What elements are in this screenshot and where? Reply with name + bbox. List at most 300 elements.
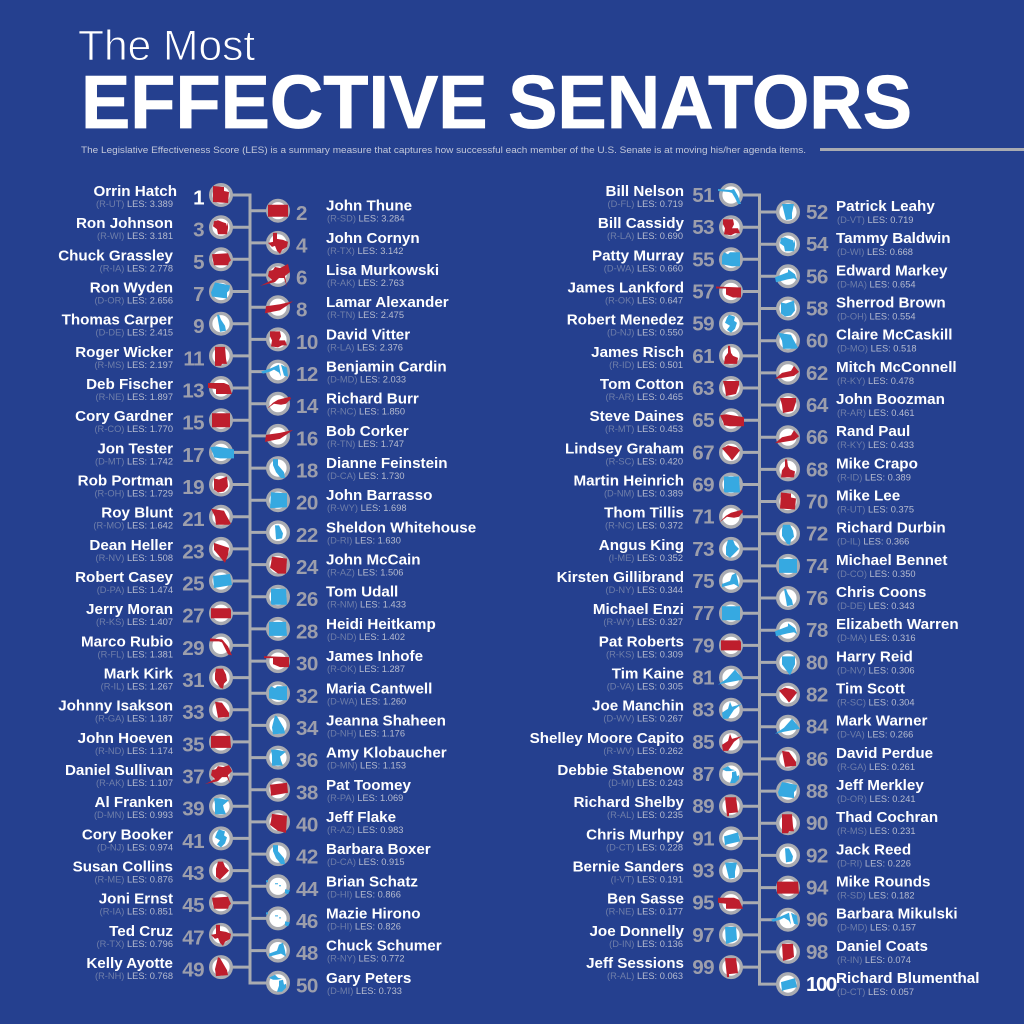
score: (D-DE) LES: 2.415	[95, 328, 173, 338]
name: Jeff Merkley	[836, 777, 924, 794]
score: (D-CA) LES: 1.730	[327, 471, 405, 481]
rank: 65	[692, 409, 714, 432]
name: Sherrod Brown	[836, 294, 946, 312]
icon: Colorado	[211, 410, 231, 430]
senator 30: James Inhofe	[264, 648, 423, 676]
name: Brian Schatz	[326, 873, 418, 890]
rank: 49	[182, 959, 204, 982]
senator 22: Sheldon Whitehouse	[268, 519, 476, 547]
rank: 78	[806, 619, 828, 642]
rank: 88	[806, 780, 828, 803]
score: (R-OK) LES: 1.287	[327, 664, 405, 674]
icon: Iowa	[211, 892, 231, 913]
icon: Arkansas	[778, 395, 798, 415]
name: Tom Cotton	[600, 376, 684, 393]
rank: 14	[296, 395, 319, 418]
score: (D-DE) LES: 0.343	[837, 601, 915, 611]
senator 7: Ron Wyden	[90, 280, 231, 306]
name: Ron Wyden	[90, 280, 173, 296]
score: (D-RI) LES: 0.226	[837, 858, 911, 868]
rank: 42	[296, 846, 318, 869]
rank: 33	[182, 701, 204, 724]
score: (D-OR) LES: 0.241	[837, 794, 916, 804]
column: ranks 51 to 99	[530, 183, 744, 981]
name: Maria Cantwell	[326, 680, 432, 697]
icon: Tennessee	[265, 426, 293, 446]
rank: 16	[296, 427, 318, 450]
rank: 25	[182, 572, 204, 596]
rank: 38	[296, 781, 318, 804]
rank: 3	[193, 219, 204, 242]
name: Daniel Coats	[836, 938, 928, 955]
column: ranks 52 to 100	[771, 198, 979, 997]
senator 31: Mark Kirk	[101, 666, 231, 692]
icon: Kentucky	[775, 427, 799, 448]
senator 6: Lisa Murkowski	[260, 262, 439, 290]
rank: 53	[692, 216, 714, 239]
icon: Rhode Island	[268, 522, 288, 543]
senator 33: Johnny Isakson	[58, 698, 231, 724]
icon: West Virginia	[721, 699, 742, 720]
name: Barbara Boxer	[326, 841, 431, 858]
rank: 91	[692, 827, 714, 850]
rank: 55	[692, 248, 714, 271]
icon: Arkansas	[721, 378, 741, 398]
rank: 87	[692, 763, 714, 786]
rank: 37	[182, 766, 204, 789]
name: John McCain	[326, 552, 421, 569]
score: (R-IA) LES: 0.851	[100, 907, 173, 917]
name: Mazie Hirono	[326, 905, 421, 922]
icon: Arizona	[268, 554, 288, 575]
icon: Montana	[210, 442, 234, 463]
rank: 6	[296, 266, 307, 290]
icon: Connecticut	[778, 974, 798, 994]
icon: Wisconsin	[778, 234, 798, 254]
name: Tim Scott	[836, 681, 905, 698]
rank: 69	[692, 474, 714, 496]
score: (D-HI) LES: 0.866	[327, 889, 401, 899]
icon: Oregon	[211, 281, 231, 302]
senator 88: Jeff Merkley	[778, 777, 924, 804]
rank: 98	[806, 941, 828, 964]
score: (R-OK) LES: 0.647	[605, 296, 683, 306]
rank: 79	[692, 634, 714, 657]
rank: 67	[692, 441, 714, 464]
rank: 20	[296, 492, 318, 515]
rank: 30	[296, 653, 318, 676]
rank: 75	[692, 570, 714, 593]
icon: Kansas	[721, 635, 741, 656]
score: (D-WV) LES: 0.267	[603, 714, 683, 724]
senator 83: Joe Manchin	[592, 698, 742, 724]
senator 65: Steve Daines	[589, 408, 744, 434]
rank: 17	[182, 444, 204, 467]
name: Sheldon Whitehouse	[326, 519, 476, 536]
rank: 45	[182, 894, 204, 917]
score: (R-OH) LES: 1.729	[94, 488, 173, 498]
icon: New York	[721, 571, 741, 591]
rank: 58	[806, 298, 828, 320]
icon: California	[268, 458, 288, 478]
rank: 64	[806, 394, 829, 417]
senator 4: John Cornyn	[268, 230, 420, 257]
senator 20: John Barrasso	[268, 487, 432, 515]
score: (D-MI) LES: 0.733	[327, 986, 402, 996]
rank: 13	[182, 380, 204, 402]
name: Jeanna Shaheen	[326, 712, 446, 729]
name: Bill Nelson	[606, 183, 684, 200]
name: Tammy Baldwin	[836, 230, 950, 247]
senator 89: Richard Shelby	[573, 794, 741, 820]
subtitle: definition of LES: The Legislative Effectiveness Score (LES) is a summary measure that captures how successful each member of the U.S. Senate is at moving his/her agenda items.	[81, 145, 806, 156]
icon: Nevada	[778, 652, 798, 675]
rank: 61	[692, 345, 714, 368]
rank: 81	[692, 667, 714, 690]
name: James Lankford	[568, 280, 684, 296]
score: (D-NJ) LES: 0.550	[607, 328, 683, 338]
score: (D-VT) LES: 0.719	[837, 215, 913, 225]
icon: Maryland	[261, 361, 288, 382]
senator 90: Thad Cochran	[778, 809, 938, 836]
icon: Massachusetts	[775, 266, 798, 287]
icon: Nebraska	[718, 892, 743, 913]
score: (I-ME) LES: 0.352	[609, 553, 683, 563]
name: Mike Crapo	[836, 455, 918, 472]
rank: 15	[182, 412, 204, 435]
score: (D-VA) LES: 0.305	[607, 682, 683, 692]
name: Ben Sasse	[607, 891, 684, 908]
icon: Connecticut	[721, 828, 741, 849]
senator 2: John Thune	[268, 198, 412, 225]
score: (R-LA) LES: 2.376	[327, 342, 403, 352]
score: (D-ND) LES: 1.402	[327, 632, 405, 642]
senator 93: Bernie Sanders	[573, 859, 741, 885]
name: David Vitter	[326, 326, 410, 343]
name: Richard Burr	[326, 391, 419, 408]
senator 9: Thomas Carper	[62, 312, 231, 338]
senator 67: Lindsey Graham	[565, 440, 741, 466]
icon: Iowa	[211, 249, 231, 270]
score: (R-NV) LES: 1.508	[95, 553, 173, 563]
score: (D-NY) LES: 0.344	[605, 585, 683, 595]
name: Elizabeth Warren	[836, 616, 959, 633]
icon: Oklahoma	[264, 651, 289, 671]
score: (D-IL) LES: 0.366	[837, 537, 909, 547]
name: Chris Murhpy	[586, 826, 685, 843]
name: Roger Wicker	[75, 344, 173, 361]
name: Jeff Flake	[326, 809, 396, 826]
rank: 51	[692, 184, 714, 207]
score: (D-NV) LES: 0.306	[837, 665, 915, 675]
icon: Illinois	[211, 667, 231, 689]
score: (D-NM) LES: 0.389	[604, 488, 683, 498]
senator 80: Harry Reid	[778, 648, 915, 675]
score: (R-NM) LES: 1.433	[327, 600, 406, 610]
name: Chuck Schumer	[326, 938, 442, 955]
senator 17: Jon Tester	[95, 440, 234, 467]
score: (D-MN) LES: 1.153	[327, 761, 406, 771]
rank: 8	[296, 299, 307, 322]
icon: Nebraska	[208, 378, 232, 398]
icon: Delaware	[211, 313, 231, 334]
name: Barbara Mikulski	[836, 906, 958, 923]
score: (D-OH) LES: 0.554	[837, 312, 916, 322]
score: (D-MO) LES: 0.518	[837, 344, 917, 354]
name: Jack Reed	[836, 841, 911, 858]
icon: New York	[268, 940, 288, 961]
icon: Wyoming	[268, 490, 288, 510]
score: (R-SC) LES: 0.420	[605, 456, 683, 466]
score: (R-UT) LES: 3.389	[96, 199, 173, 209]
icon: Wisconsin	[211, 217, 231, 238]
senator 71: Thom Tillis	[604, 505, 743, 531]
name: Robert Menedez	[567, 312, 684, 329]
icon: Rhode Island	[778, 845, 798, 866]
score: (R-IA) LES: 2.778	[100, 263, 173, 273]
icon: Hawaii	[266, 908, 290, 929]
icon: Indiana	[778, 942, 798, 962]
senator 15: Cory Gardner	[75, 408, 231, 435]
rank: 83	[692, 699, 714, 722]
icon: Pennsylvania	[211, 571, 232, 591]
icon: Kentucky	[775, 363, 799, 383]
icon: Louisiana	[721, 217, 741, 238]
name: Harry Reid	[836, 648, 913, 665]
title: The Most: The Most	[78, 23, 255, 70]
icon: North Dakota	[211, 732, 231, 752]
rank: 31	[182, 669, 204, 692]
icon: Oklahoma	[716, 281, 741, 302]
icon: North Carolina	[719, 506, 743, 527]
score: (D-PA) LES: 1.474	[97, 585, 173, 595]
senator 24: John McCain	[268, 552, 421, 579]
score: (R-SD) LES: 3.284	[327, 214, 405, 224]
score: (D-CA) LES: 0.915	[327, 857, 405, 867]
name: John Hoeven	[78, 730, 173, 747]
senator 72: Richard Durbin	[778, 520, 946, 547]
senator 44: Brian Schatz	[266, 873, 418, 901]
icon: Arizona	[268, 812, 288, 833]
rank: 92	[806, 844, 828, 867]
senator 5: Chuck Grassley	[58, 247, 231, 274]
rank: 77	[692, 602, 714, 625]
senator 1: Orrin Hatch	[93, 183, 231, 210]
name: Joe Manchin	[592, 698, 684, 715]
icon: Alabama	[721, 957, 741, 977]
icon: Michigan	[721, 764, 741, 784]
name: Lindsey Graham	[565, 440, 684, 457]
senator 85: Shelley Moore Capito	[530, 730, 742, 756]
name: Dean Heller	[89, 537, 173, 554]
icon: Georgia	[211, 699, 231, 720]
rank: 80	[806, 651, 828, 674]
rank: 5	[193, 251, 204, 274]
icon: Tennessee	[265, 297, 293, 318]
rank: 95	[692, 892, 714, 915]
icon: South Carolina	[721, 442, 741, 463]
icon: Vermont	[721, 860, 741, 881]
rank: 68	[806, 458, 828, 481]
icon: Idaho	[721, 346, 741, 366]
header rule	[820, 148, 1024, 151]
score: (R-IN) LES: 0.074	[837, 955, 911, 965]
senator 21: Roy Blunt	[93, 505, 231, 531]
score: (D-MA) LES: 0.654	[837, 279, 916, 289]
score: (R-KY) LES: 0.433	[837, 440, 914, 450]
rank: 21	[182, 508, 204, 531]
senator 96: Barbara Mikulski	[771, 906, 958, 933]
icon: Louisiana	[268, 329, 288, 350]
senator 8: Lamar Alexander	[265, 294, 449, 322]
score: (D-HI) LES: 0.826	[327, 921, 401, 931]
score: (R-NE) LES: 1.897	[95, 392, 173, 402]
senator 56: Edward Markey	[775, 262, 948, 289]
name: Shelley Moore Capito	[530, 730, 684, 747]
rank: 90	[806, 812, 828, 835]
rank: 35	[182, 733, 204, 756]
name: Heidi Heitkamp	[326, 616, 436, 633]
score: (D-NJ) LES: 0.974	[97, 842, 173, 852]
name: James Inhofe	[326, 648, 423, 665]
name: Richard Shelby	[573, 794, 685, 811]
senator 92: Jack Reed	[778, 841, 911, 868]
score: (D-MN) LES: 0.993	[94, 810, 173, 820]
score: (R-MS) LES: 2.197	[94, 360, 173, 370]
name: Thomas Carper	[62, 312, 173, 329]
rank: 76	[806, 587, 828, 610]
name: Gary Peters	[326, 970, 411, 987]
senator 34: Jeanna Shaheen	[268, 712, 446, 740]
score: (R-ID) LES: 0.389	[837, 472, 911, 482]
rank: 60	[806, 330, 828, 353]
icon: Vermont	[778, 202, 798, 222]
score: (R-UT) LES: 0.375	[837, 504, 914, 514]
senator 51: Bill Nelson	[606, 183, 741, 209]
icon: Massachusetts	[775, 620, 798, 640]
rank: 96	[806, 909, 828, 932]
score: (D-WI) LES: 0.668	[837, 247, 913, 257]
rank: 100	[806, 973, 837, 996]
score: (D-CT) LES: 0.057	[837, 987, 914, 997]
senator 48: Chuck Schumer	[268, 938, 442, 965]
icon: Idaho	[778, 459, 798, 480]
rank: 57	[692, 280, 714, 304]
icon: Utah	[778, 491, 798, 512]
score: (R-NC) LES: 1.850	[327, 407, 405, 417]
senator 78: Elizabeth Warren	[775, 616, 959, 643]
senator 46: Mazie Hirono	[266, 905, 421, 933]
score: (D-VA) LES: 0.266	[837, 730, 913, 740]
name: Lisa Murkowski	[326, 262, 439, 279]
rank: 36	[296, 749, 318, 772]
score: (D-MT) LES: 1.742	[95, 456, 173, 466]
name: Pat Toomey	[326, 777, 412, 794]
rank: 85	[692, 731, 714, 754]
senator 14: Richard Burr	[267, 391, 419, 418]
name: John Cornyn	[326, 230, 420, 247]
name: Susan Collins	[73, 859, 173, 876]
rank: 48	[296, 942, 318, 965]
icon: Texas	[268, 233, 288, 254]
score: (R-TX) LES: 3.142	[327, 246, 403, 256]
score: (R-KS) LES: 0.309	[606, 649, 683, 659]
icon: Maine	[211, 860, 231, 881]
senator 68: Mike Crapo	[778, 455, 918, 482]
senator 36: Amy Klobaucher	[268, 745, 447, 772]
score: (R-NE) LES: 0.177	[605, 907, 683, 917]
senator 49: Kelly Ayotte	[86, 955, 231, 982]
senator 59: Robert Menedez	[567, 312, 741, 338]
senator 28: Heidi Heitkamp	[268, 616, 436, 643]
name: Debbie Stabenow	[557, 762, 684, 779]
score: (R-MT) LES: 0.453	[605, 424, 683, 434]
name: Mark Warner	[836, 713, 928, 730]
score: (R-SD) LES: 0.182	[837, 891, 915, 901]
score: (D-IN) LES: 0.136	[609, 939, 683, 949]
senator 74: Michael Bennet	[778, 552, 947, 579]
score: (R-AR) LES: 0.461	[837, 408, 915, 418]
rank: 10	[296, 331, 318, 354]
score: (R-AL) LES: 0.063	[607, 971, 683, 981]
icon: Maryland	[771, 909, 798, 930]
score: (D-FL) LES: 0.719	[608, 199, 683, 209]
score: (R-TN) LES: 1.747	[327, 439, 404, 449]
rank: 39	[182, 798, 204, 821]
icon: Missouri	[778, 330, 798, 351]
name: Mitch McConnell	[836, 359, 957, 376]
senator 75: Kirsten Gillibrand	[557, 569, 741, 595]
score: (R-ID) LES: 0.501	[609, 360, 683, 370]
icon: Maine	[721, 539, 741, 559]
score: (R-ND) LES: 1.174	[95, 746, 173, 756]
icon: Virginia	[718, 667, 743, 688]
score: (D-WA) LES: 0.660	[604, 263, 683, 273]
score: (I-VT) LES: 0.191	[611, 875, 683, 885]
icon: Alabama	[721, 796, 741, 816]
rank: 99	[692, 956, 714, 979]
name: Jon Tester	[97, 440, 173, 457]
rank: 26	[296, 588, 318, 611]
rank: 50	[296, 974, 318, 997]
score: (R-AZ) LES: 1.506	[327, 568, 403, 578]
rank: 52	[806, 201, 828, 224]
name: Ted Cruz	[109, 923, 173, 940]
name: Chris Coons	[836, 584, 926, 601]
name: Deb Fischer	[86, 376, 173, 393]
senator 95: Ben Sasse	[605, 891, 743, 917]
rank: 32	[296, 685, 318, 708]
score: (D-RI) LES: 1.630	[327, 535, 401, 545]
senator 19: Rob Portman	[78, 472, 231, 499]
rank: 54	[806, 233, 829, 256]
icon: Utah	[211, 185, 231, 205]
score: (R-FL) LES: 1.381	[98, 649, 173, 659]
senator 40: Jeff Flake	[268, 809, 403, 836]
senator 73: Angus King	[599, 537, 741, 563]
icon: Minnesota	[211, 796, 231, 816]
name: Mike Lee	[836, 488, 900, 504]
connector tree: left half	[221, 195, 278, 983]
rank: 11	[183, 347, 204, 370]
score: (R-AR) LES: 0.465	[605, 392, 683, 402]
name: Al Franken	[94, 794, 173, 811]
senator 66: Rand Paul	[775, 423, 914, 450]
score: (D-OR) LES: 2.656	[94, 296, 173, 306]
rank: 18	[296, 460, 318, 483]
name: David Perdue	[836, 745, 933, 762]
rank: 24	[296, 556, 319, 579]
